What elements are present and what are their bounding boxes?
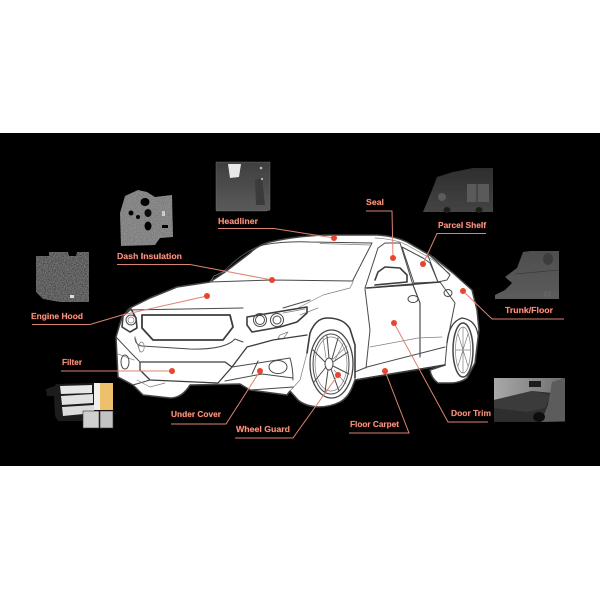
callout: wheel guard: Wheel Guard	[236, 424, 290, 434]
callout: floor carpet	[349, 368, 409, 433]
right headlight	[247, 307, 307, 339]
callout: trunk floor	[460, 288, 564, 319]
callout: parcel shelf: Parcel Shelf	[438, 220, 486, 230]
rear wheel	[447, 318, 478, 377]
callout: under cover: Under Cover	[171, 409, 222, 419]
callout: seal	[366, 197, 396, 261]
callout: filter	[61, 357, 175, 374]
front wheel arch	[307, 318, 355, 378]
grille	[142, 315, 233, 340]
doors and body lines	[290, 282, 455, 391]
callout: headliner	[218, 216, 337, 241]
car illustration	[116, 235, 479, 407]
bumper and lower intake	[116, 300, 310, 390]
callout: headliner: Headliner	[218, 216, 259, 226]
infographic content	[31, 162, 565, 438]
callout: door trim	[391, 320, 491, 422]
part: engine hood	[36, 252, 89, 302]
callout: engine hood	[31, 293, 210, 324]
part: dash insulation	[120, 190, 173, 246]
left headlight	[122, 309, 137, 332]
callout: dash insulation	[117, 251, 275, 283]
part: headliner	[216, 162, 270, 211]
black background band	[0, 133, 600, 466]
callout: trunk floor: Trunk/Floor	[505, 305, 554, 315]
callout: filter: Filter	[62, 357, 83, 367]
callout: under cover	[171, 368, 263, 424]
windshield and cowl	[210, 238, 450, 282]
callout: dash insulation: Dash Insulation	[117, 251, 182, 261]
front wheel	[310, 330, 353, 398]
callout: parcel shelf	[420, 220, 486, 267]
part: filters	[46, 383, 113, 428]
callout: seal: Seal	[366, 197, 384, 207]
car body silhouette	[116, 235, 479, 407]
part: door trim	[494, 378, 565, 422]
side windows	[365, 243, 450, 288]
callout: door trim: Door Trim	[451, 408, 491, 418]
part: trunk floor	[495, 251, 559, 299]
callout: floor carpet: Floor Carpet	[350, 419, 399, 429]
callout: engine hood: Engine Hood	[31, 311, 83, 321]
callout: wheel guard	[235, 372, 341, 438]
part: parcel shelf	[423, 168, 493, 213]
